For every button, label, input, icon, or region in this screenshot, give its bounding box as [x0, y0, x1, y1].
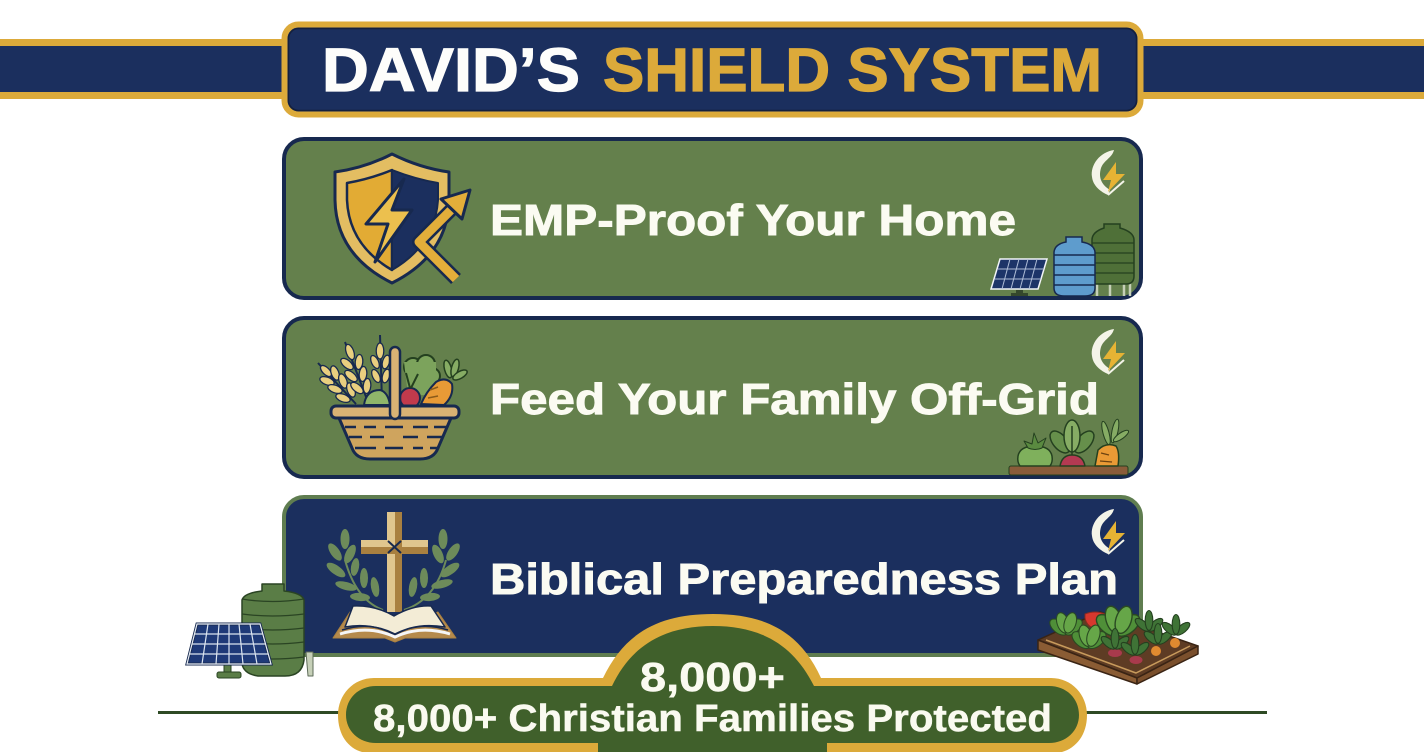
icon: raised garden bed: [1038, 604, 1198, 684]
rule: right of badge: [1085, 711, 1267, 714]
icon: leaf and bolt badge: [1092, 150, 1125, 195]
panel: EMP-Proof Your Home: [284, 139, 1141, 298]
icon: green water tank: [1092, 224, 1134, 296]
panel text: EMP-Proof Your Home: [490, 196, 1016, 245]
title banner: [284, 24, 1140, 114]
badge: families protected: [338, 614, 1087, 752]
panel: Feed Your Family Off-Grid: [284, 318, 1141, 477]
title text: gold: SHIELD SYSTEM: [603, 36, 1102, 104]
icon: blue water tank: [1054, 237, 1095, 296]
icon: shield with bolt and arrow: [335, 154, 470, 283]
title text: white: DAVID’S: [322, 36, 580, 104]
icon: green water tank: [242, 584, 313, 676]
rule: left of badge: [158, 711, 340, 714]
icon: solar panel: [991, 259, 1047, 296]
panel text: Biblical Preparedness Plan: [490, 555, 1118, 604]
icon: leaf and bolt badge: [1092, 329, 1125, 374]
badge caption: 8,000+ Christian Families Protected: [373, 698, 1052, 740]
badge number: 8,000+: [640, 654, 785, 700]
header band: [0, 39, 1424, 99]
icon: harvest basket: [318, 335, 469, 459]
icon: solar panel: [187, 624, 271, 678]
icon: leaf and bolt badge: [1092, 509, 1125, 554]
panel: Biblical Preparedness Plan: [284, 497, 1141, 655]
panel text: Feed Your Family Off-Grid: [490, 375, 1099, 424]
icon: cross wreath and open bible: [324, 512, 462, 642]
icon: garden vegetables on shelf: [1009, 419, 1130, 475]
